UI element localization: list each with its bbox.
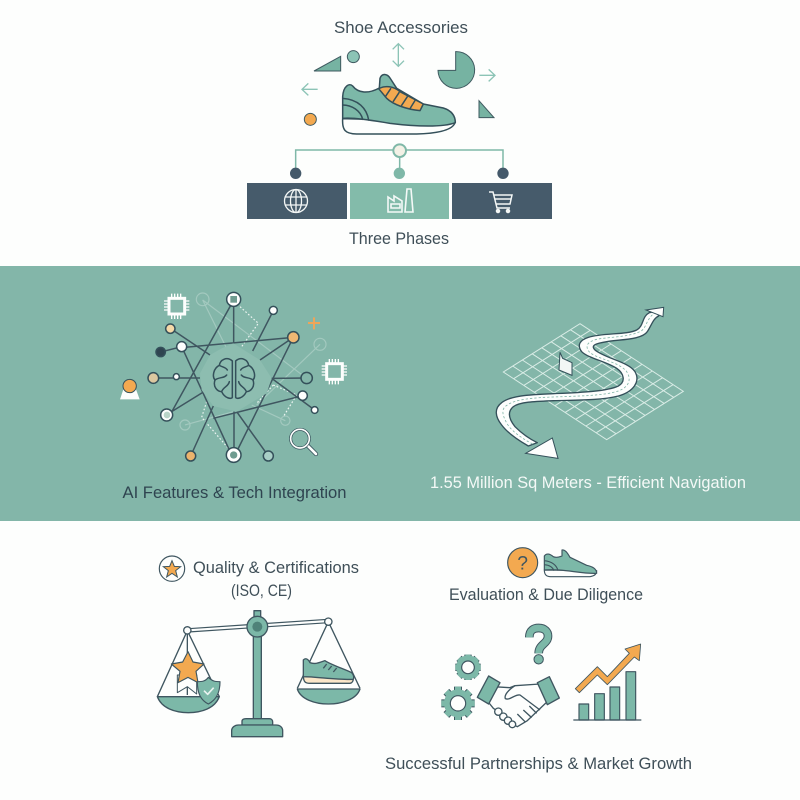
icon: chip right: [322, 359, 347, 384]
icon: sneaker on scale: [303, 659, 354, 683]
icon: small sneaker: [544, 550, 597, 577]
icon: orange plus: [308, 317, 320, 329]
icon: globe: [284, 190, 308, 212]
phase box: cart: [452, 183, 552, 219]
heading: ISO CE: (ISO, CE): [231, 581, 292, 600]
network nodes: [148, 292, 318, 462]
icon: orange circle: [304, 113, 316, 125]
beam: [188, 619, 328, 632]
scale column and base: [232, 611, 283, 737]
connector tree: [290, 144, 509, 179]
node: top hub: [227, 292, 241, 306]
icon: growth arrow: [575, 644, 641, 693]
road arrowhead top: [646, 307, 664, 317]
icon: cart: [489, 192, 512, 212]
left cuff: [477, 676, 500, 704]
right cuff: [537, 677, 559, 705]
right pan: [297, 618, 360, 704]
faint network lines: [180, 293, 326, 430]
panel: teal band: [0, 266, 800, 521]
node: left ring: [161, 409, 173, 421]
brain backdrop: [200, 343, 272, 412]
panel: three phase bar: [247, 183, 552, 219]
left pan: [157, 627, 220, 713]
icon: magnifier: [291, 429, 316, 454]
road: [496, 311, 659, 446]
illustration: AI network: [120, 292, 347, 462]
illustration: partnerships: [441, 628, 641, 728]
icon: shield: [197, 677, 220, 704]
illustration: shoe and floating shapes: [290, 44, 509, 179]
heading: Shoe Accessories: Shoe Accessories: [334, 18, 468, 37]
node: right: [497, 168, 509, 179]
icon: brain: [213, 359, 255, 398]
icon: bar chart: [573, 672, 641, 720]
icon: ribbon: [177, 675, 197, 694]
heading: AI Features: AI Features & Tech Integration: [122, 483, 346, 502]
node: bottom hub: [226, 448, 241, 462]
road centre dashes: [503, 314, 653, 444]
illustration: quality badge icon: [159, 556, 185, 581]
node: left: [290, 168, 301, 179]
phase box: globe: [247, 183, 347, 219]
icon: arrow right: [479, 69, 495, 81]
heading: Quality & Certifications: Quality & Certifications: [193, 558, 359, 577]
illustration: balance scale: [157, 611, 360, 737]
dashed lines: [202, 307, 297, 448]
icon: star: [171, 652, 204, 683]
icon: sneaker: [343, 75, 455, 134]
icon: chip left: [164, 294, 189, 319]
icon: arrow left: [302, 83, 318, 95]
icon: teal circle: [347, 51, 359, 63]
icon: small triangle: [479, 101, 494, 118]
icon: small gear: [455, 655, 481, 680]
road arrowhead bottom: [526, 438, 558, 458]
icon: pie shape: [438, 52, 475, 88]
icon: person: [120, 379, 140, 399]
icon: handshake: [477, 676, 559, 728]
pivot: [247, 616, 268, 637]
node: hub: [393, 144, 406, 157]
icon: map flag: [559, 352, 572, 375]
illustration: evaluation icons: [508, 548, 597, 578]
icon: big question mark: [529, 628, 548, 653]
dark network lines: [153, 300, 315, 456]
heading: Successful Partnerships: Successful Partnerships & Market Growth: [385, 754, 692, 773]
icon: orange question circle: ?: [517, 553, 528, 574]
heading: 1.55 Million: 1.55 Million Sq Meters - Efficient Navigation: [430, 473, 746, 492]
icon: triangle top left: [314, 56, 341, 71]
illustration: grid and winding road: [496, 307, 683, 458]
icon: vertical double arrow: [393, 44, 404, 66]
icon: large gear: [441, 687, 475, 720]
heading: Three Phases: Three Phases: [349, 229, 449, 248]
isometric grid: [503, 324, 683, 440]
icon: factory: [388, 189, 413, 212]
heading: Evaluation: Evaluation & Due Diligence: [449, 585, 643, 604]
icon: question dot: [534, 655, 543, 664]
phase box: factory: [350, 183, 449, 219]
node: middle: [394, 168, 405, 179]
